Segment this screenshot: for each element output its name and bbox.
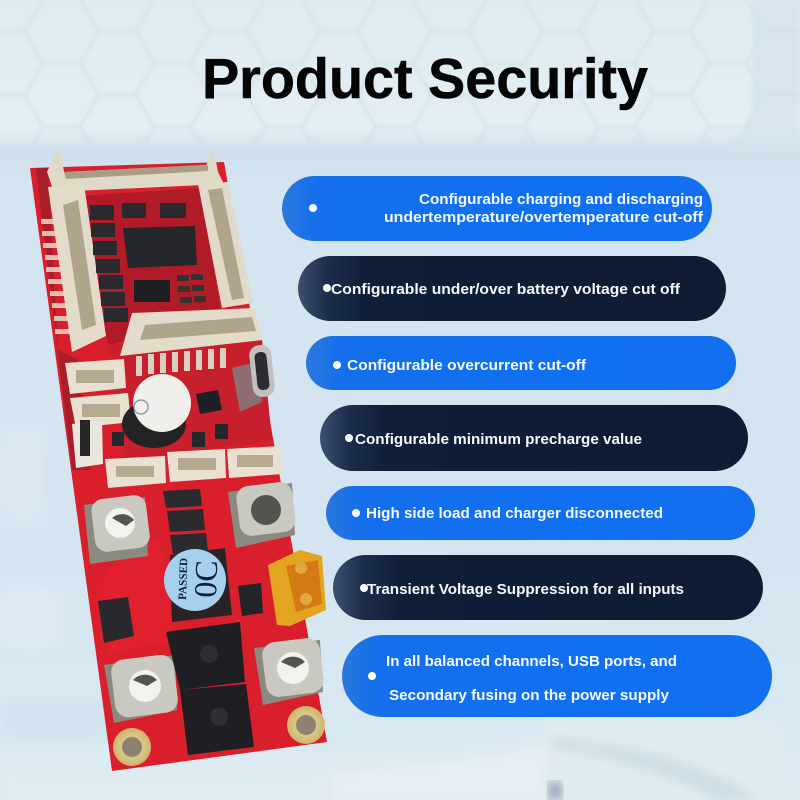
board substrate: [30, 162, 327, 771]
pill 2: [298, 256, 726, 321]
passed sticker: [164, 549, 226, 611]
pill 7: Secondary fusing on the power supply: [389, 687, 670, 704]
small resistor array: [177, 274, 206, 303]
current sense resistors: [90, 203, 186, 322]
main IC: [123, 226, 197, 268]
pill 3: Configurable overcurrent cut-off: [347, 357, 587, 374]
JST connector 5: [227, 446, 283, 478]
pill 2: Configurable under/over battery voltage cut off: [331, 281, 681, 298]
mounting hole left: [113, 728, 151, 766]
terminal: common: [228, 481, 297, 548]
driver IC: [98, 597, 134, 643]
left connector: [48, 184, 106, 352]
right connector: [198, 182, 253, 308]
pill 6: [333, 555, 763, 620]
pill 5: [326, 486, 755, 540]
pill 7: [342, 635, 772, 717]
JST connector 4: [167, 449, 226, 482]
bottom connector: [120, 308, 263, 356]
passed sticker: PASSED: [177, 558, 190, 600]
JST connector 3: [105, 456, 166, 488]
pill 1: [282, 176, 712, 241]
circuit board: [30, 150, 327, 771]
terminal: pack plus: [104, 653, 179, 723]
JST connector 1: [65, 359, 126, 394]
pill 1: Configurable charging and discharging: [419, 191, 703, 208]
terminal: load plus: [254, 637, 325, 705]
pill 4: [320, 405, 748, 471]
top connector: [47, 150, 224, 192]
MOSFET upper: [166, 622, 245, 690]
mounting hole right: [287, 706, 325, 744]
power switch: [72, 420, 103, 468]
pill 3: [306, 336, 736, 390]
title: Product Security: [202, 47, 648, 111]
JST connector 2: [70, 393, 131, 428]
buzzer: [122, 374, 191, 448]
power resistors: [163, 489, 208, 554]
passed sticker: 0C: [187, 560, 224, 598]
small transistors: [112, 424, 228, 447]
USB-C port: [232, 344, 276, 412]
pill 7: In all balanced channels, USB ports, and: [386, 653, 677, 670]
MOSFET lower: [180, 684, 254, 755]
pill 1: undertemperature/overtemperature cut-off: [384, 209, 704, 226]
small IC: [134, 280, 170, 302]
pill 4: Configurable minimum precharge value: [355, 431, 642, 448]
pill 6: Transient Voltage Suppression for all inputs: [367, 581, 684, 598]
pin header row: [136, 348, 226, 376]
microcontroller: [196, 390, 222, 414]
pill 5: High side load and charger disconnected: [366, 505, 663, 522]
terminal: pack minus: [84, 494, 151, 564]
MOSFET under sticker: [170, 548, 232, 622]
small MOSFET: [238, 583, 263, 616]
XT30 connector: [268, 550, 326, 626]
